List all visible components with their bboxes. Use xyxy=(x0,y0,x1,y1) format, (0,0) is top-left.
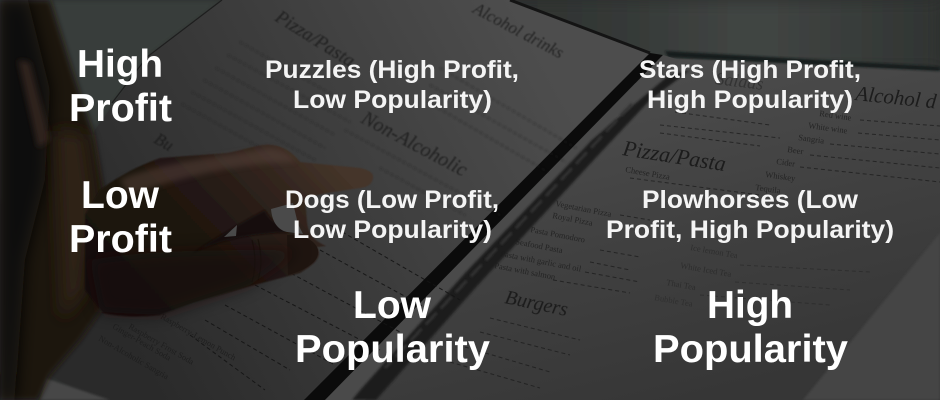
right page list items: Cheese Pizza xyxy=(625,164,671,182)
right page list items: Pasta Pomodoro xyxy=(530,224,586,245)
quadrant: Stars: High Popularity) xyxy=(647,86,853,114)
quadrant: Stars xyxy=(639,56,861,114)
left page list items: Non-Alcoholic Sangria xyxy=(97,333,171,381)
left page list lines xyxy=(182,42,576,215)
quadrant: Dogs: Low Popularity) xyxy=(293,216,492,244)
left page script headings xyxy=(151,0,567,181)
left page script headings: Alcohol drinks xyxy=(469,0,567,62)
wall area top left xyxy=(0,0,225,200)
row label: High Profit: High xyxy=(77,43,163,86)
right page list items: Pasta with garlic and oil xyxy=(500,248,583,274)
right page list items: Bubble Tea xyxy=(654,292,694,309)
right page list items: Thai Tea xyxy=(666,277,697,292)
right page script headings: Pizza/Pasta xyxy=(620,135,728,176)
menu top edge left page xyxy=(510,0,650,53)
right page list items: White wine xyxy=(808,120,848,135)
lower hand shadow xyxy=(90,250,300,315)
left page list items xyxy=(97,311,238,381)
lower left page dashed lines xyxy=(190,225,460,390)
knuckle highlight xyxy=(120,148,296,195)
left menu page xyxy=(50,0,650,400)
left page script headings: Non-Alcoholic xyxy=(357,107,471,181)
small gap near fingers xyxy=(224,225,237,237)
right page list items: Sangria xyxy=(798,132,825,146)
hand xyxy=(85,145,373,316)
ribbon highlight xyxy=(385,104,632,368)
quadrant: Stars: Stars (High Profit, xyxy=(639,56,861,84)
right page list items: Beer xyxy=(787,144,804,156)
right page script headings xyxy=(503,68,938,321)
left page script headings: Pizza/Pasta xyxy=(271,6,359,72)
quadrant: Plowhorses xyxy=(606,186,894,244)
menu cover thin edge top left xyxy=(112,0,222,103)
column label: High Popularity: High xyxy=(707,284,793,327)
right page list items: Vegetarian Pizza xyxy=(555,198,613,219)
column label: Low Popularity: Low xyxy=(353,284,432,327)
right page list items: Whiskey xyxy=(765,169,797,183)
quadrant: Dogs: Dogs (Low Profit, xyxy=(285,186,499,214)
row label: Low Profit: Low xyxy=(81,174,160,217)
quadrant: Puzzles: Low Popularity) xyxy=(293,86,492,114)
right page list items: Royal Pizza xyxy=(552,210,594,228)
right page dashed lines xyxy=(450,112,940,388)
quadrant: Puzzles: Puzzles (High Profit, xyxy=(265,56,519,84)
right page list items: Pasta with salmon xyxy=(494,260,557,282)
right page script headings: Alcohol d xyxy=(852,81,938,113)
right page list items: Tequila xyxy=(755,182,781,196)
column label: High Popularity xyxy=(653,284,849,371)
right page script headings: Salads xyxy=(715,68,765,94)
left page list items: Raspberry-Lemon Punch xyxy=(159,311,238,363)
lighter inner gutter xyxy=(325,55,680,400)
right menu page xyxy=(345,58,940,400)
row label: High Profit xyxy=(69,43,172,130)
ribbon xyxy=(352,70,690,400)
shadow between fingers xyxy=(190,210,300,255)
column label: Low Popularity xyxy=(295,284,491,371)
quadrant: Puzzles xyxy=(265,56,519,114)
row label: Low Profit: Profit xyxy=(69,218,172,261)
right page script headings: Burgers xyxy=(503,286,570,321)
left page script headings: Bu xyxy=(151,129,177,155)
right page list items: Ice lemon Tea xyxy=(690,242,739,260)
right page top black edge xyxy=(665,51,940,71)
hair xyxy=(0,0,108,400)
table corner, bottom right xyxy=(803,233,940,400)
lower left under hand light corner xyxy=(40,378,110,400)
column label: Low Popularity: Popularity xyxy=(295,328,491,371)
row label: Low Profit xyxy=(69,174,172,261)
right page list items: White Iced Tea xyxy=(680,260,732,279)
right page list items xyxy=(494,108,852,309)
left page list items: Raspberry Frost Soda xyxy=(127,321,196,367)
right page list items: Red wine xyxy=(819,108,852,123)
quadrant: Plowhorses: Profit, High Popularity) xyxy=(606,216,894,244)
quadrant: Plowhorses: Plowhorses (Low xyxy=(642,186,859,214)
row label: High Profit: Profit xyxy=(69,87,172,130)
menu spine black band xyxy=(304,53,663,400)
column label: High Popularity: Popularity xyxy=(653,328,849,371)
thumb knuckle creases xyxy=(252,239,261,282)
right page list items: Seafood Pasta xyxy=(515,236,564,255)
wall area top right xyxy=(470,0,940,70)
page gap between fingers xyxy=(271,203,303,234)
right page list items: Cider xyxy=(776,156,796,169)
quadrant: Dogs xyxy=(285,186,499,244)
thumb nail and fold xyxy=(287,235,318,275)
left page list items: Ginger-Peach Soda xyxy=(111,321,173,363)
